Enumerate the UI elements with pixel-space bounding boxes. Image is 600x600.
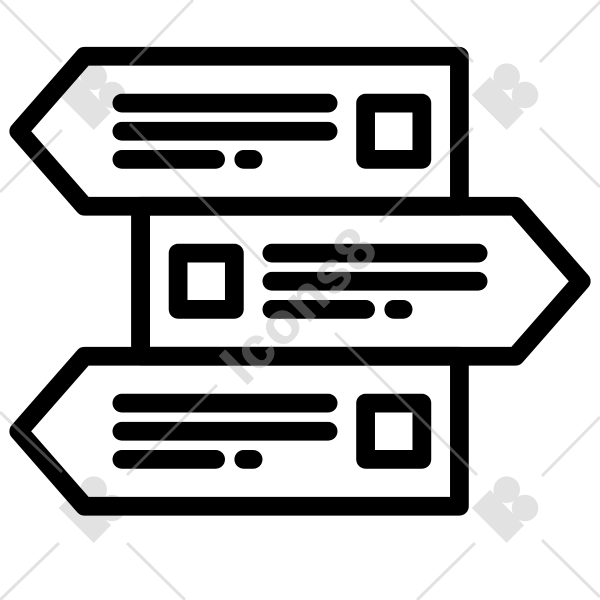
watermark text: Icons8 — [208, 214, 390, 396]
sign: middle arrow pointing right — [141, 206, 581, 356]
post: connecting stem — [131, 206, 150, 356]
watermark logo: bottom right — [472, 476, 538, 543]
sign: top arrow pointing left — [19, 56, 459, 206]
sign: bottom arrow pointing left — [19, 356, 459, 506]
watermark logo: bottom left — [59, 476, 125, 543]
watermark logo: top right — [472, 63, 538, 130]
watermark logos under the icon — [59, 63, 538, 543]
icon: signpost — [19, 56, 581, 506]
watermark logo: top left — [59, 63, 125, 130]
